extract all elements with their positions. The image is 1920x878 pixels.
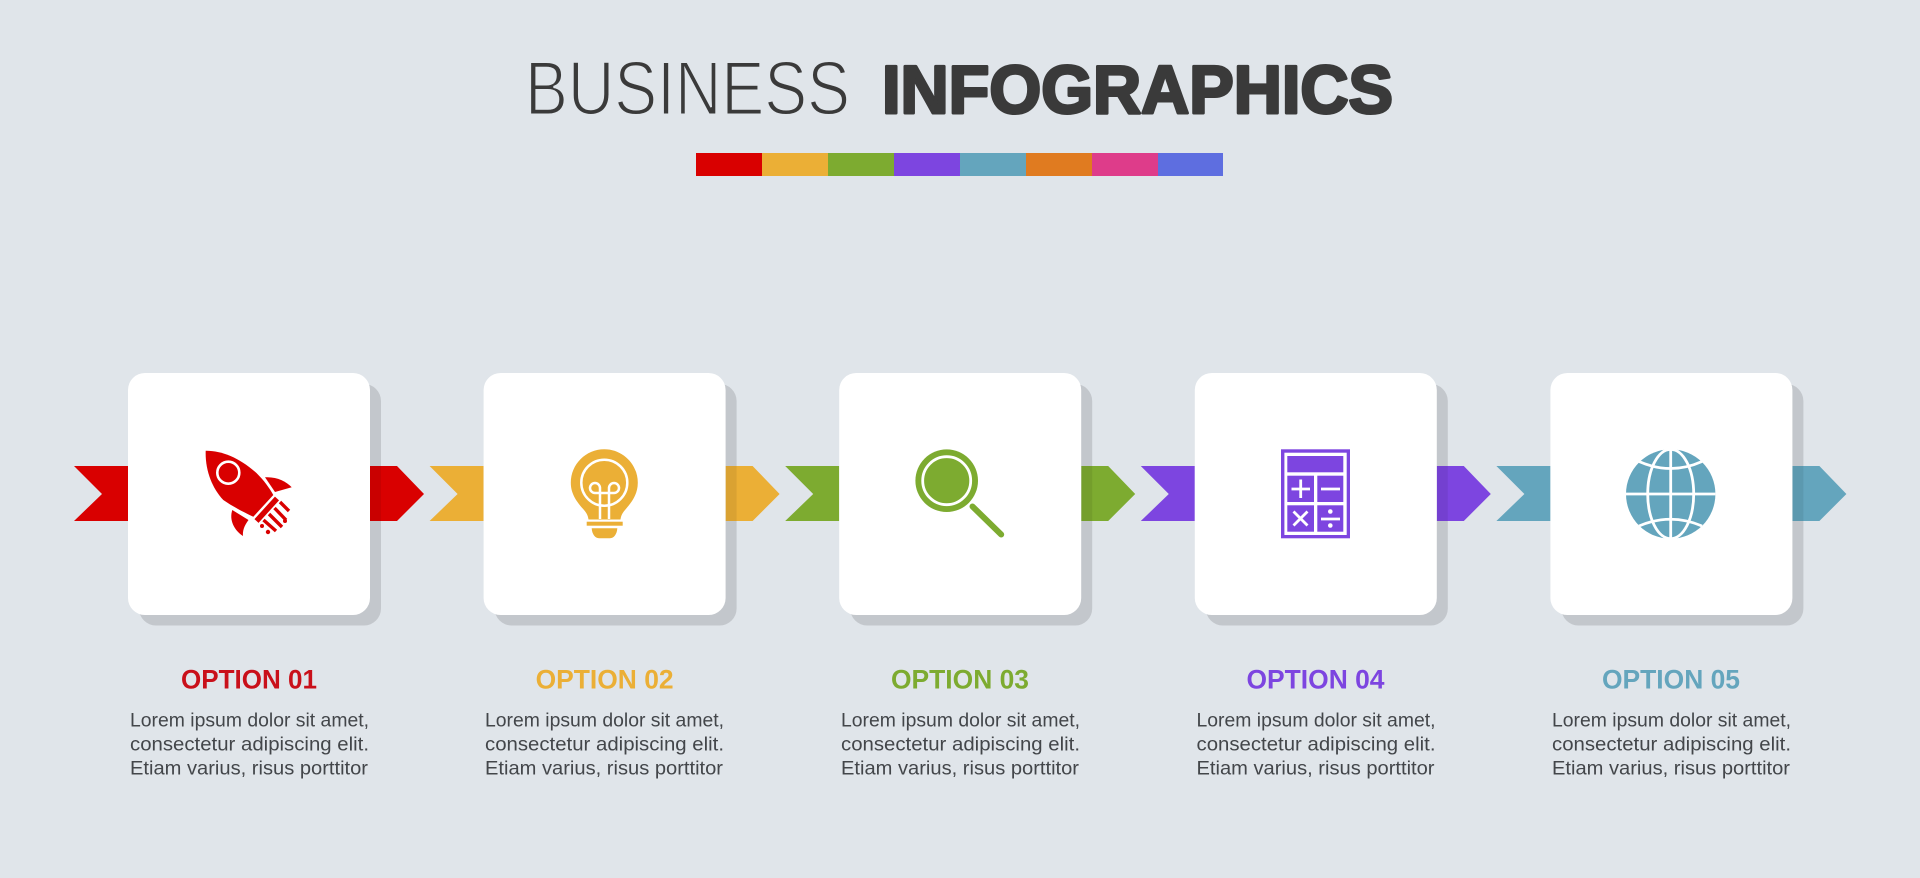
text block: option 01: Lorem ipsum dolor sit amet, — [130, 710, 369, 732]
panel: option 05 — [1496, 373, 1846, 780]
text block: option 04: consectetur adipiscing elit. — [1196, 734, 1436, 756]
text block: option 01: consectetur adipiscing elit. — [130, 734, 369, 756]
text block: option 05: Etiam varius, risus porttitor — [1552, 758, 1791, 780]
arrow shade: option 02 — [726, 466, 737, 521]
text block: option 02: consectetur adipiscing elit. — [485, 734, 724, 756]
icon: calculator — [1281, 449, 1350, 538]
panel: option 03 — [785, 373, 1135, 780]
card shadow: option 05 — [1561, 384, 1803, 626]
icon: globe — [1626, 449, 1715, 539]
card shadow: option 03 — [850, 384, 1092, 626]
text block: option 03: Lorem ipsum dolor sit amet, — [841, 710, 1080, 732]
arrow: option 04 — [1141, 466, 1491, 521]
card: option 02 — [484, 373, 726, 615]
text block: option 01 — [130, 710, 369, 780]
text block: option 04: Lorem ipsum dolor sit amet, — [1196, 710, 1436, 732]
panel: option 04 — [1141, 373, 1491, 780]
text block: option 02 — [485, 710, 724, 780]
card: option 04 — [1195, 373, 1437, 615]
heading: option 01: OPTION 01 — [181, 664, 317, 694]
heading: option 05: OPTION 05 — [1602, 664, 1740, 694]
heading: option 02: OPTION 02 — [536, 664, 674, 694]
arrow: option 01 — [74, 466, 424, 521]
arrow shade: option 05 — [1792, 466, 1803, 521]
icon: light bulb — [571, 449, 638, 538]
text block: option 03: Etiam varius, risus porttitor — [841, 758, 1080, 780]
title: BUSINESS — [525, 46, 850, 132]
text block: option 05 — [1552, 710, 1791, 780]
arrow shade: option 01 — [370, 466, 381, 521]
title — [525, 46, 1393, 132]
card shadow: option 04 — [1206, 384, 1448, 626]
text block: option 02: Etiam varius, risus porttitor — [485, 758, 724, 780]
arrow: option 02 — [430, 466, 780, 521]
text block: option 01: Etiam varius, risus porttitor — [130, 758, 369, 780]
text block: option 03: consectetur adipiscing elit. — [841, 734, 1080, 756]
heading: option 03: OPTION 03 — [891, 664, 1029, 694]
panel: option 01 — [74, 373, 424, 780]
title: INFOGRAPHICS — [882, 52, 1393, 128]
card: option 01 — [128, 373, 370, 615]
arrow: option 05 — [1496, 466, 1846, 521]
arrow shade: option 03 — [1081, 466, 1092, 521]
text block: option 05: consectetur adipiscing elit. — [1552, 734, 1791, 756]
card shadow: option 02 — [495, 384, 737, 626]
panel: option 02 — [430, 373, 780, 780]
arrow: option 03 — [785, 466, 1135, 521]
arrow shade: option 04 — [1437, 466, 1448, 521]
card shadow: option 01 — [139, 384, 381, 626]
text block: option 04: Etiam varius, risus porttitor — [1196, 758, 1435, 780]
text block: option 02: Lorem ipsum dolor sit amet, — [485, 710, 724, 732]
card: option 03 — [839, 373, 1081, 615]
text block: option 05: Lorem ipsum dolor sit amet, — [1552, 710, 1791, 732]
text block: option 04 — [1196, 710, 1436, 780]
icon: rocket — [206, 451, 292, 536]
card: option 05 — [1550, 373, 1792, 615]
icon: magnifier — [915, 449, 1001, 534]
colour strip — [696, 153, 1223, 176]
heading: option 04: OPTION 04 — [1246, 664, 1384, 694]
text block: option 03 — [841, 710, 1080, 780]
